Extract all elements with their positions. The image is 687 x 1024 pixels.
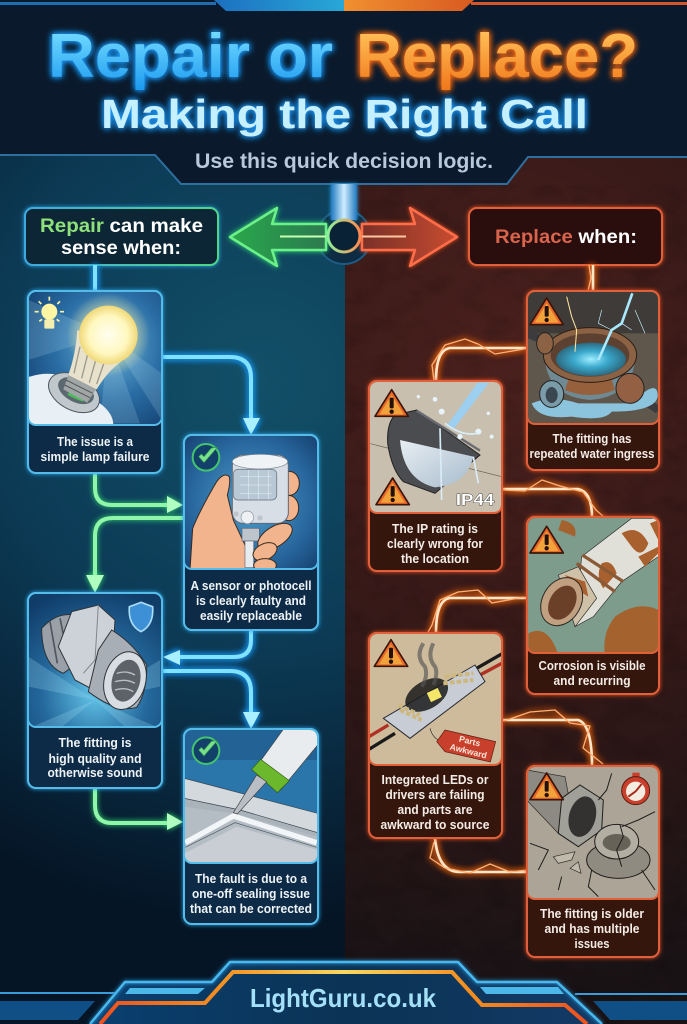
illustration: flooded rusty junction box [527, 290, 658, 425]
caption: that can be corrected [190, 902, 312, 916]
heading box: repair [25, 208, 218, 265]
central splitter [230, 184, 457, 266]
texture: grunge on replace side [345, 185, 687, 1024]
caption [190, 579, 312, 623]
caption: repeated water ingress [530, 447, 655, 461]
caption: high quality and [48, 752, 142, 766]
caption: The issue is a [57, 435, 134, 449]
illustration outline [369, 381, 502, 513]
header plate edge [0, 155, 687, 184]
card: failing integrated LEDs [369, 632, 502, 838]
card: older fitting with multiple issues [527, 766, 659, 957]
caption: A sensor or photocell [190, 579, 312, 593]
caption: clearly wrong for [387, 537, 483, 551]
card: repeated water ingress [527, 290, 659, 470]
card frame [184, 729, 318, 924]
footer plate [0, 962, 687, 1024]
caption: the location [401, 552, 469, 566]
card frame [28, 593, 162, 788]
caption [530, 432, 655, 461]
header plate [0, 0, 687, 184]
caption: otherwise sound [48, 766, 142, 780]
caption: issues [574, 937, 610, 951]
title [48, 22, 638, 91]
card frame [527, 517, 659, 694]
illustration outline [28, 291, 162, 425]
caption: The fitting has [552, 432, 632, 446]
illustration: hand holding sensor [184, 435, 318, 572]
panel: repair side background [0, 155, 345, 1024]
title: Replace? [356, 22, 638, 91]
caption [190, 872, 312, 916]
card: wrong IP rating [369, 381, 502, 571]
caption: Integrated LEDs or [382, 773, 489, 787]
illustration: metal fitting [28, 592, 162, 728]
illustration: glowing bulb in fitting [28, 290, 162, 427]
illustration outline [369, 633, 502, 765]
subtitle heading: Making the Right Call [101, 91, 588, 137]
caption: simple lamp failure [40, 450, 150, 464]
caption: The IP rating is [392, 522, 478, 536]
illustration: cracked old fitting [527, 767, 658, 900]
illustration outline [527, 517, 659, 653]
illustration outline [184, 435, 318, 569]
heading box: repair: Repair can make [40, 216, 203, 237]
caption: The fitting is older [540, 907, 644, 921]
card frame [369, 633, 502, 838]
illustration: wet bulkhead light: IP44 [456, 492, 495, 509]
illustration: burnt LED driver: Awkward [449, 742, 488, 761]
caption: easily replaceable [200, 609, 302, 623]
card: one-off sealing issue [184, 729, 318, 924]
caption: The fault is due to a [195, 872, 308, 886]
caption [387, 522, 483, 566]
caption: and parts are [398, 803, 473, 817]
illustration outline [527, 291, 659, 424]
card frame [184, 435, 318, 630]
card: high quality fitting [28, 592, 162, 788]
card: simple lamp failure [28, 290, 162, 473]
caption: Corrosion is visible [538, 659, 646, 673]
caption [48, 736, 142, 780]
arrows: replace flow lightning connectors [428, 265, 604, 873]
caption: and has multiple [544, 922, 640, 936]
heading box: replace [469, 208, 662, 265]
illustration: rusted pipe [527, 517, 658, 656]
card frame [369, 381, 502, 571]
caption: is clearly faulty and [196, 594, 306, 608]
illustration: burnt LED driver [369, 632, 502, 767]
arrow: green to repair [230, 208, 326, 266]
arrows: repair flow blue connectors [95, 265, 260, 729]
caption [538, 659, 646, 688]
caption: and recurring [554, 674, 630, 688]
panel: replace side background [345, 155, 687, 1024]
intro text: Use this quick decision logic. [195, 150, 493, 173]
top notched bar [0, 0, 687, 11]
card: faulty sensor [184, 435, 318, 630]
illustration outline [527, 766, 659, 899]
illustration outline [184, 729, 318, 863]
card frame [527, 291, 659, 470]
title: Repair or [48, 22, 333, 91]
card: visible corrosion [527, 517, 659, 694]
arrows: repair flow green connectors [86, 473, 184, 830]
illustration: wet bulkhead light [369, 381, 502, 514]
illustration: sealant tube on frame [184, 729, 318, 865]
illustration: burnt LED driver: Parts [458, 734, 482, 749]
caption: The fitting is [58, 736, 132, 750]
heading box: replace: Replace when: [495, 227, 637, 248]
caption: awkward to source [380, 818, 490, 832]
card frame [527, 766, 659, 957]
caption: one-off sealing issue [192, 887, 310, 901]
caption [380, 773, 490, 832]
website: LightGuru.co.uk [250, 983, 436, 1013]
illustration outline [28, 593, 162, 727]
caption: drivers are failing [386, 788, 484, 802]
arrow: red to replace [362, 208, 457, 266]
card frame [28, 291, 162, 473]
caption [40, 435, 150, 464]
caption [540, 907, 644, 951]
heading box: repair: sense when: [61, 238, 181, 259]
